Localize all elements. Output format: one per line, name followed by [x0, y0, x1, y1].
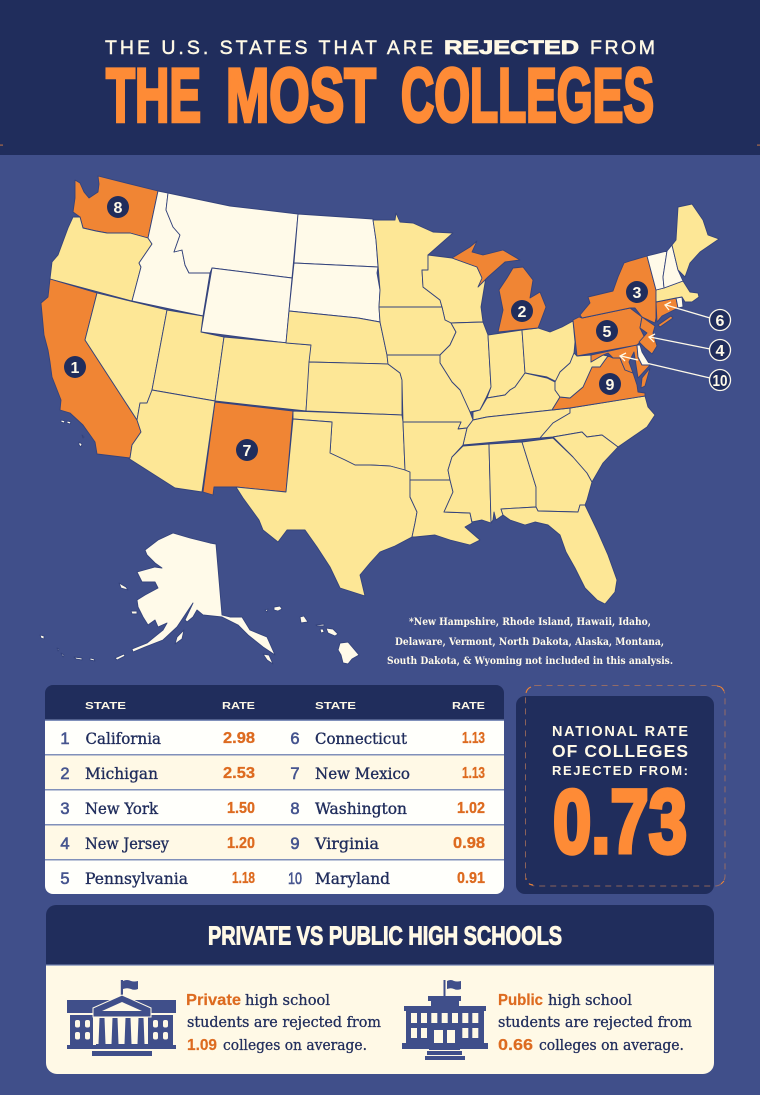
icon: public school building: [402, 980, 488, 1060]
national rate label: [552, 724, 688, 778]
private school text: colleges on average.: [223, 1036, 367, 1054]
state: Kansas: [306, 362, 402, 415]
private school text: Private: [186, 992, 241, 1009]
row 4: New Jersey and Virginia: 9: [290, 835, 300, 853]
public school text: students are rejected from: [498, 1013, 692, 1031]
marker 9: 9: [606, 377, 615, 394]
row 2: Michigan and New Mexico: 7: [290, 765, 300, 783]
marker 1: [64, 356, 86, 378]
panel heading: PRIVATE VS PUBLIC HIGH SCHOOLS: [208, 920, 562, 950]
row 2: Michigan and New Mexico: New Mexico: [315, 764, 410, 783]
icon: private school building: [67, 980, 176, 1056]
state: Nebraska: [286, 311, 388, 364]
state: Texas: [236, 419, 417, 596]
row 2: Michigan and New Mexico: 1.13: [462, 765, 485, 782]
state: North Carolina: [540, 396, 655, 447]
row 1: California and Connecticut: Connecticut: [315, 729, 408, 748]
row 2: Michigan and New Mexico: Michigan: [85, 764, 158, 783]
public school text: high school: [548, 991, 632, 1009]
California islands: [61, 420, 84, 447]
arrow to New Jersey: [649, 334, 710, 349]
state: Minnesota: [373, 213, 453, 307]
row 2: Michigan and New Mexico: 2: [60, 765, 70, 783]
state: Arizona: [128, 390, 215, 492]
row 2: Michigan and New Mexico: [60, 764, 485, 783]
state: Vermont: [647, 251, 667, 290]
row 5: Pennsylvania and Maryland: 1.18: [232, 870, 255, 887]
state: Alaska: [132, 533, 275, 655]
row 1: California and Connecticut: California: [86, 729, 161, 748]
row 4: New Jersey and Virginia: New Jersey: [85, 834, 169, 853]
private school text: high school: [245, 991, 330, 1009]
row 4: New Jersey and Virginia: 0.98: [453, 835, 485, 852]
table header: [45, 685, 504, 720]
state: Florida: [501, 505, 617, 604]
national rate label: OF COLLEGES: [552, 741, 688, 761]
private school text: 1.09: [187, 1037, 217, 1054]
state: Mississippi: [444, 444, 491, 523]
table header: STATE: [315, 701, 356, 712]
row 1: California and Connecticut: 1: [60, 730, 70, 748]
callout 6: 6: [716, 313, 725, 330]
arrow to Maryland: [620, 353, 710, 378]
row 3: New York and Washington: New York: [85, 799, 158, 818]
state: Wyoming: [201, 268, 292, 343]
national rate label: NATIONAL RATE: [552, 724, 688, 740]
subtitle: REJECTED: [444, 37, 579, 59]
public school text: 0.66: [498, 1037, 533, 1054]
state: Connecticut: [656, 298, 678, 322]
table rows background: [45, 720, 504, 894]
header banner: [0, 0, 760, 155]
national rate value: 0.73: [553, 772, 687, 872]
footnote: Delaware, Vermont, North Dakota, Alaska, Montana,: [395, 636, 664, 648]
state: South Dakota: [289, 263, 380, 322]
row 4: New Jersey and Virginia: Virginia: [314, 834, 379, 853]
map of the United States: [40, 176, 719, 664]
row 5: Pennsylvania and Maryland: 5: [60, 870, 70, 888]
marker 5: [596, 320, 618, 342]
row 1: California and Connecticut: 1.13: [462, 730, 485, 747]
state: Virginia eastern shore: [641, 368, 650, 388]
state: Utah: [152, 310, 224, 401]
footnote: South Dakota, & Wyoming not included in this analysis.: [387, 655, 673, 667]
Alaska islands: [40, 583, 273, 664]
state: Maryland: [591, 345, 650, 378]
state: Michigan upper peninsula: [452, 241, 520, 287]
row 5: Pennsylvania and Maryland: 0.91: [457, 870, 485, 887]
state: North Dakota: [294, 214, 378, 267]
national rate label: REJECTED FROM:: [552, 763, 688, 778]
state: Wisconsin: [422, 255, 486, 323]
table header: STATE: [85, 701, 126, 712]
row 1: California and Connecticut: [60, 729, 485, 748]
state: Maine: [672, 204, 719, 277]
subtitle: FROM: [590, 37, 655, 59]
table header: RATE: [222, 701, 255, 712]
state: Michigan lower peninsula: [498, 267, 546, 332]
callout 10: 10: [712, 373, 728, 390]
state: Massachusetts: [656, 281, 699, 302]
arrows and callout markers for small states: [620, 302, 730, 390]
state: Ohio: [522, 321, 575, 382]
state: Colorado: [215, 337, 311, 411]
marker 5: 5: [603, 324, 612, 341]
state: Pennsylvania: [573, 308, 645, 356]
public school text: Public: [498, 992, 543, 1009]
private school text: [186, 991, 381, 1054]
subtitle: THE U.S. STATES THAT ARE: [105, 37, 433, 59]
title: THE: [106, 54, 201, 138]
arrow to Connecticut: [665, 302, 710, 318]
state: Long Island: [658, 316, 673, 327]
state: Louisiana: [410, 480, 480, 545]
state: Oklahoma: [293, 411, 405, 470]
number markers on the map: [64, 196, 648, 461]
marker 3: 3: [633, 285, 642, 302]
panel: private vs public high schools: [46, 905, 714, 1074]
state: Idaho: [132, 191, 210, 316]
state: Kentucky: [473, 373, 560, 420]
state: New Mexico: [203, 402, 293, 495]
title: [106, 54, 654, 138]
marker 7: [236, 439, 258, 461]
row 3: New York and Washington: 8: [290, 800, 300, 818]
row 5: Pennsylvania and Maryland: Maryland: [315, 869, 390, 888]
row 5: Pennsylvania and Maryland: Pennsylvania: [85, 869, 188, 888]
marker 7: 7: [243, 443, 252, 460]
row 4: New Jersey and Virginia: [60, 834, 485, 853]
marker 3: [626, 281, 648, 303]
state: New Hampshire: [663, 245, 683, 288]
row 3: New York and Washington: 3: [60, 800, 70, 818]
panel: national rate: [516, 686, 725, 894]
state: Alabama: [489, 442, 536, 523]
row 4: New Jersey and Virginia: 1.20: [227, 835, 255, 852]
state: Virginia: [552, 356, 645, 410]
row 1: California and Connecticut: 6: [290, 730, 300, 748]
marker 8: 8: [114, 200, 123, 217]
public school text: [498, 991, 692, 1054]
Hawaii islands: [265, 606, 359, 664]
row 3: New York and Washington: 1.50: [227, 800, 255, 817]
marker 2: 2: [518, 304, 527, 321]
state: California: [41, 279, 141, 458]
footnote: *New Hampshire, Rhode Island, Hawaii, Idaho,: [409, 616, 651, 628]
public school text: colleges on average.: [539, 1036, 684, 1054]
state: Georgia: [522, 438, 592, 512]
state: Iowa: [379, 307, 456, 355]
row 3: New York and Washington: [60, 799, 485, 818]
state: Indiana: [487, 330, 525, 398]
marker 1: 1: [71, 360, 80, 377]
title: MOST: [226, 54, 376, 138]
row 3: New York and Washington: Washington: [315, 799, 407, 818]
state: Washington: [73, 176, 158, 238]
state: Oregon: [50, 217, 152, 301]
state: Delaware: [637, 345, 650, 365]
state: Arkansas: [403, 422, 467, 480]
state: New Jersey: [639, 317, 657, 354]
state: Nevada: [85, 293, 167, 420]
row 5: Pennsylvania and Maryland: 10: [288, 870, 302, 888]
state: Tennessee: [463, 408, 570, 445]
subtitle: [105, 37, 655, 59]
marker 9: [599, 373, 621, 395]
row 3: New York and Washington: 1.02: [457, 800, 485, 817]
marker 2: [511, 300, 533, 322]
row 4: New Jersey and Virginia: 4: [60, 835, 70, 853]
marker 8: [107, 196, 129, 218]
state: Montana: [166, 193, 298, 278]
table header: RATE: [452, 701, 485, 712]
row 5: Pennsylvania and Maryland: [60, 869, 485, 888]
table of state rates: [45, 685, 504, 894]
row 2: Michigan and New Mexico: 2.53: [223, 765, 255, 782]
row 1: California and Connecticut: 2.98: [223, 730, 255, 747]
private school text: students are rejected from: [187, 1013, 381, 1031]
state: Missouri: [387, 355, 473, 429]
state: New York: [580, 256, 656, 323]
state: Illinois: [440, 322, 491, 412]
callout 4: 4: [716, 343, 725, 360]
state: West Virginia: [555, 353, 608, 398]
footnote: [387, 616, 673, 667]
state: South Carolina: [553, 432, 618, 482]
state: Rhode Island: [676, 297, 683, 308]
